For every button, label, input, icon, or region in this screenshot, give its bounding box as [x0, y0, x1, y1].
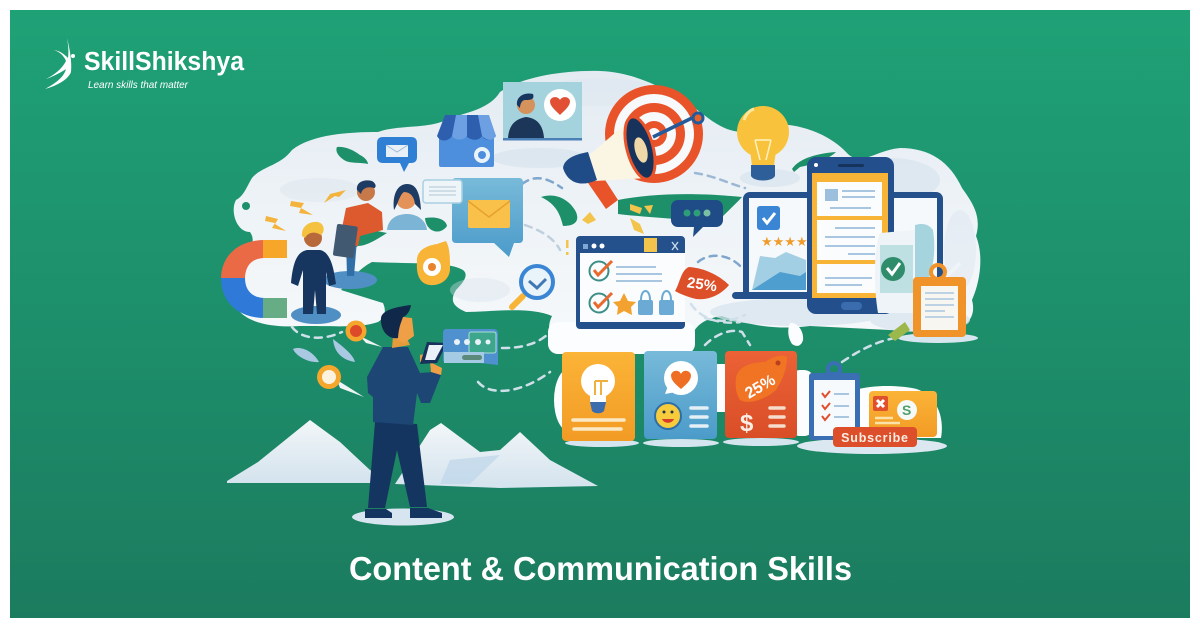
icon: magnet	[221, 240, 287, 318]
icon: magnifier	[512, 266, 553, 307]
subscribe button: Subscribe	[841, 431, 909, 445]
icon: store	[437, 115, 496, 167]
brand name: SkillShikshya	[84, 48, 245, 76]
white lobes near cards	[548, 322, 942, 438]
star and locks	[613, 291, 674, 315]
icon: pencil	[888, 322, 910, 341]
portrait	[508, 93, 544, 138]
card: discount: $	[740, 410, 754, 437]
icon: swoosh figure	[45, 38, 75, 89]
person with tablet	[365, 305, 447, 518]
chat bubble with dots	[671, 200, 723, 237]
tablet	[420, 342, 447, 364]
chat widget	[443, 329, 498, 365]
dashed connectors	[292, 173, 895, 391]
subscribe button	[833, 427, 917, 447]
icon: light bulb	[737, 106, 789, 180]
icons: small pins	[293, 320, 382, 397]
rating check	[757, 206, 780, 230]
figure shadow	[352, 508, 454, 526]
green islands	[242, 147, 836, 322]
illustration: cloud backdrop	[234, 71, 980, 438]
envelope with coin	[869, 391, 937, 437]
email chat panel	[423, 178, 523, 257]
icon: megaphone	[563, 114, 661, 209]
25% tag: 25%	[686, 274, 718, 295]
title: Content & Communication Skills	[349, 550, 852, 587]
card group: subscribe	[797, 363, 947, 454]
laptop	[732, 192, 943, 299]
logo	[45, 38, 245, 91]
person: blond man from behind	[291, 222, 341, 324]
icon: sparkles	[566, 204, 653, 255]
card: discount: 25%	[742, 372, 779, 403]
icon: mail bubble	[377, 137, 417, 172]
checklist browser window	[576, 236, 685, 329]
envelope with coin: S	[902, 402, 911, 418]
stars: ★★★★	[761, 234, 808, 249]
icon: lightning bolts	[265, 190, 346, 231]
envelope	[468, 200, 510, 228]
person: woman	[387, 184, 427, 230]
person: man in red shirt	[323, 180, 383, 289]
card: discount	[723, 351, 799, 446]
card: idea	[562, 352, 639, 447]
tablet card with check	[875, 224, 934, 313]
mountains	[227, 420, 598, 488]
card: heart and smile	[643, 351, 719, 447]
phone	[807, 157, 894, 314]
clipboard checklist	[809, 363, 860, 440]
photo card with heart	[503, 82, 582, 140]
icon: yellow speaker	[417, 241, 450, 285]
cloud shading	[280, 78, 976, 343]
25% tag	[675, 267, 729, 299]
orange clipboard	[898, 263, 978, 343]
note	[423, 180, 462, 203]
tagline: Learn skills that matter	[88, 79, 188, 91]
check items	[590, 261, 662, 312]
icon: target with arrow	[605, 85, 703, 183]
phone cards	[817, 182, 882, 293]
